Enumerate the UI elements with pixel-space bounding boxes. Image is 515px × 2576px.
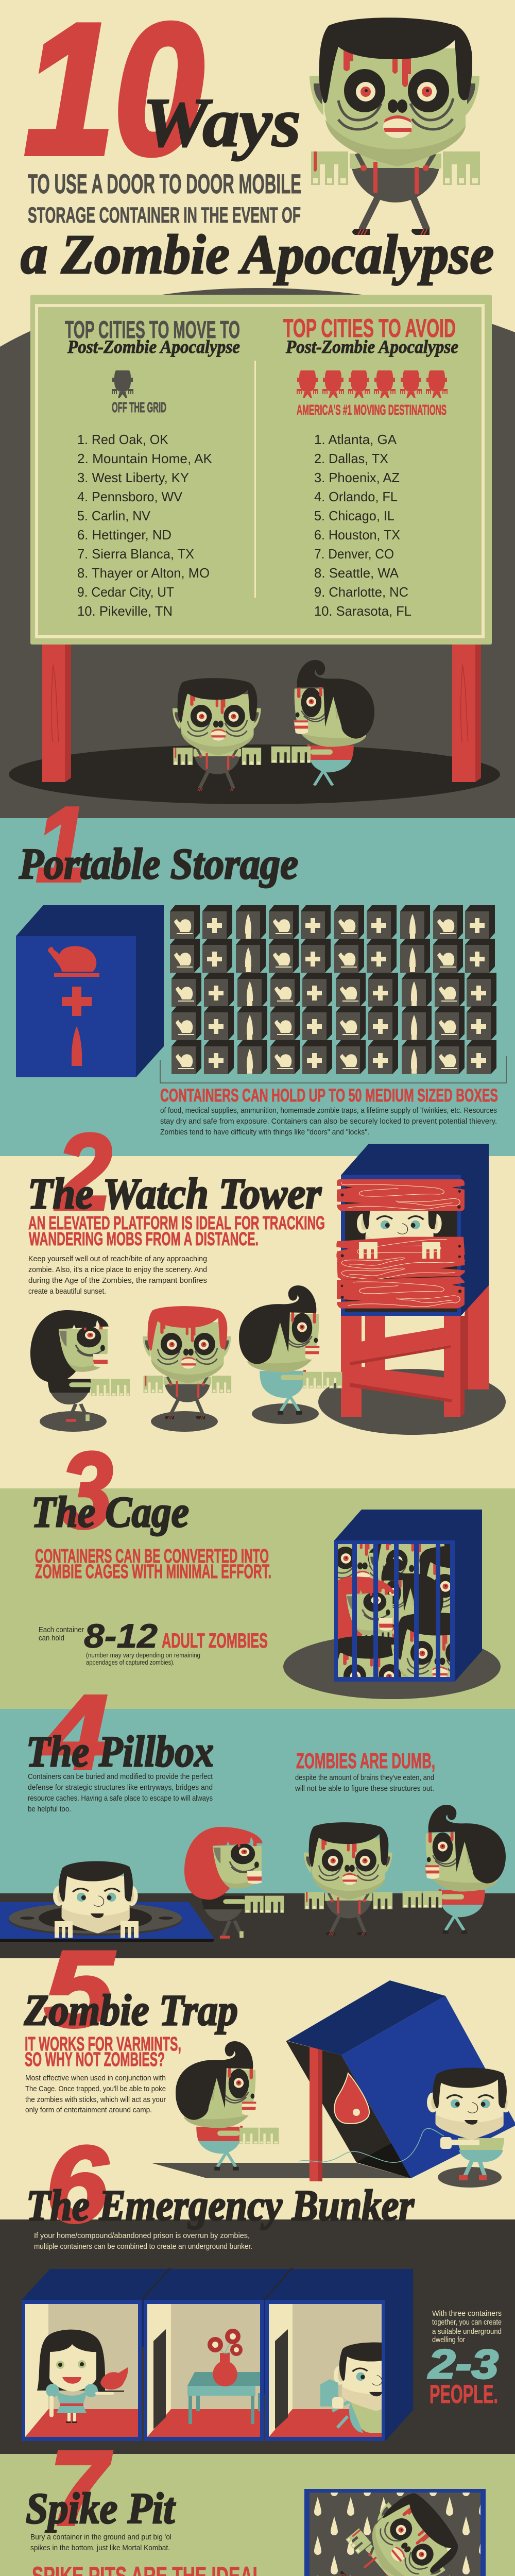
side text: three containers: dwelling for <box>432 2335 465 2344</box>
zombies approaching tower <box>30 1285 342 1432</box>
number 2: 2 <box>55 1111 112 1232</box>
callout: works for varmints <box>25 2033 181 2071</box>
list: top cities to move to: 2. Mountain Home, AK <box>77 451 213 466</box>
room 2 frame <box>144 2300 264 2441</box>
background: green section 7 <box>0 2454 515 2576</box>
callout: elevated platform: AN ELEVATED PLATFORM IS IDEAL FOR TRACKING <box>28 1212 325 1233</box>
number 7: 7 <box>49 2429 112 2547</box>
man holding string <box>427 2068 512 2188</box>
stat: 8-12 adult zombies: appendages of captured zombies). <box>86 1658 175 1666</box>
body text section 1: stay dry and safe from exposure. Containers can also be securely locked to prevent potential thievery. <box>160 1117 497 1126</box>
spike pit illustration <box>304 2483 486 2576</box>
planks on tower <box>336 1179 465 1309</box>
side text: three containers <box>432 2309 502 2344</box>
number 5: 5 <box>44 1928 115 2049</box>
background: teal section 1 <box>0 818 515 1156</box>
subtitle line 1: TO USE A DOOR TO DOOR MOBILE <box>28 169 301 199</box>
list: top cities to move to: 7. Sierra Blanca, TX <box>77 546 194 562</box>
room 3 interior <box>269 2304 382 2437</box>
body text section 2: create a beautiful sunset. <box>28 1287 106 1296</box>
list: top cities to avoid: 7. Denver, CO <box>314 546 394 562</box>
heading: spike pit: Spike Pit <box>26 2484 176 2533</box>
list: top cities to move to: 8. Thayer or Alton, MO <box>77 565 210 581</box>
list: top cities to move to: 5. Carlin, NV <box>77 508 151 523</box>
background: cream section 5 <box>0 1958 515 2219</box>
icons: six zombies <box>297 370 448 398</box>
list: top cities to avoid: 1. Atlanta, GA <box>314 432 397 447</box>
grid of 50 boxes <box>170 905 496 1074</box>
room 1 frame <box>22 2300 142 2441</box>
background: cream section 2 <box>0 1156 515 1488</box>
heading: cities to move to: TOP CITIES TO MOVE TO <box>65 316 240 343</box>
side text: three containers: a suitable underground <box>432 2327 502 2336</box>
buried container hatch <box>0 1861 214 1942</box>
body text section 7 <box>30 2533 171 2552</box>
list: top cities to avoid: 2. Dallas, TX <box>314 451 388 466</box>
list: top cities to avoid: 8. Seattle, WA <box>314 565 399 581</box>
callout: zombies are dumb: despite the amount of brains they've eaten, and <box>295 1773 434 1782</box>
man reading book <box>320 2342 382 2433</box>
body text section 5: only form of entertainment around camp. <box>25 2106 152 2114</box>
callout: elevated platform <box>28 1212 325 1249</box>
room 2 interior <box>147 2304 260 2437</box>
number 1: 1 <box>36 785 87 904</box>
heading: the cage: The Cage <box>31 1488 189 1536</box>
tower shadow <box>318 1369 506 1435</box>
list: top cities to avoid: 3. Phoenix, AZ <box>314 470 400 485</box>
panel: billboard <box>30 295 492 645</box>
title block <box>21 0 494 285</box>
list: top cities to move to <box>77 432 213 619</box>
body text section 5 <box>25 2074 166 2114</box>
body text section 5: the zombies with sticks, which will act as your <box>25 2095 166 2104</box>
body text section 2 <box>28 1255 207 1296</box>
trap shadow floor <box>151 2163 411 2178</box>
container with supplies <box>16 905 164 1077</box>
list: top cities to avoid: 9. Charlotte, NC <box>314 584 408 600</box>
body text section 6 <box>34 2231 252 2251</box>
hands holding plank <box>359 1242 440 1259</box>
body text section 6: If your home/compound/abandoned prison is overrun by zombies, <box>34 2231 250 2240</box>
panel: billboard posts <box>42 644 481 782</box>
stat: 2-3 people <box>427 2341 499 2409</box>
subtitle line 2: STORAGE CONTAINER IN THE EVENT OF <box>28 203 301 228</box>
cross braces <box>348 1327 451 1362</box>
room 3 frame <box>265 2300 385 2441</box>
number 4: 4 <box>42 1673 108 1791</box>
list: top cities to move to: 10. Pikeville, TN <box>77 603 173 619</box>
panel: section 7 spike pit <box>26 2429 486 2576</box>
body text section 1: Zombies tend to have difficulty with things like "doors" and "locks". <box>160 1128 369 1137</box>
callout: zombies are dumb <box>295 1749 435 1793</box>
list: top cities to move to: 4. Pennsboro, WV <box>77 489 183 504</box>
bunker three containers <box>22 2268 414 2441</box>
list: top cities to avoid: 10. Sarasota, FL <box>314 603 411 619</box>
man peeking out <box>53 1861 138 1934</box>
list: top cities to avoid: 5. Chicago, IL <box>314 508 394 523</box>
body text section 1 <box>160 1106 497 1137</box>
heading: portable storage: Portable Storage <box>19 840 298 888</box>
zombies at the pillbox <box>184 1805 506 1939</box>
stat: 8-12 adult zombies <box>39 1617 268 1666</box>
zombie walking into trap <box>176 2041 279 2171</box>
icon: large zombie <box>310 18 480 235</box>
number 3: 3 <box>60 1430 113 1551</box>
panel: section 5 zombie trap <box>24 1928 515 2188</box>
trigger string <box>299 2128 444 2162</box>
callout: works for varmints: SO WHY NOT ZOMBIES? <box>25 2049 165 2071</box>
heading: zombie trap: Zombie Trap <box>24 1986 238 2035</box>
bracket under boxes <box>160 1056 506 1083</box>
panel: section 6 emergency bunker <box>22 2124 502 2441</box>
watch tower structure <box>336 1144 489 1417</box>
heading: the pillbox: The Pillbox <box>26 1727 214 1776</box>
background: dark hill behind billboard <box>0 288 515 824</box>
icon: off the grid zombie <box>112 370 133 398</box>
woman with turkey <box>37 2330 128 2423</box>
subheading left: Post-Zombie Apocalypse <box>67 336 240 357</box>
body text section 7: Bury a container in the ground and put big 'ol <box>30 2533 171 2541</box>
heading: the emergency bunker: The Emergency Bunker <box>26 2181 415 2230</box>
background: cream header <box>0 0 515 361</box>
stat: 8-12 adult zombies: ADULT ZOMBIES <box>162 1630 268 1652</box>
panel: section 4 the pillbox <box>0 1673 506 1942</box>
background: dark ground section 4 <box>0 1893 515 1958</box>
stat: 8-12 adult zombies: can hold <box>39 1634 64 1642</box>
background: green section 3 <box>0 1488 515 1709</box>
stat: 8-12 adult zombies: (number may vary depending on remaining <box>86 1651 200 1659</box>
body text section 4: resource caches. Having a safe place to escape to will always <box>28 1794 213 1803</box>
body text section 4 <box>28 1772 213 1814</box>
body text section 6: multiple containers can be combined to create an underground bunker. <box>34 2242 252 2251</box>
man peeking out of tower <box>357 1189 442 1261</box>
tilted trap container <box>286 1980 515 2181</box>
callout: containers converted into cages <box>35 1546 271 1583</box>
background: dark section 6 <box>0 2219 515 2454</box>
panel: section 1 portable storage <box>16 785 506 1137</box>
panel: section 2 watch tower <box>28 1111 506 1435</box>
body text section 4: Containers can be buried and modified to provide the perfect <box>28 1772 213 1781</box>
stat: 8-12 adult zombies: Each container <box>39 1625 84 1634</box>
zombie cage <box>334 1510 482 1682</box>
background: teal section 4 <box>0 1709 515 1893</box>
title word Ways: Ways <box>143 84 301 161</box>
body text section 2: Keep yourself well out of reach/bite of any approaching <box>28 1255 207 1263</box>
side text: three containers: together, you can create <box>432 2318 502 2327</box>
list: top cities to avoid: 6. Houston, TX <box>314 527 400 543</box>
label: off the grid: OFF THE GRID <box>112 399 166 415</box>
callout: zombies are dumb: will not be able to figure these structures out. <box>295 1784 434 1793</box>
list: top cities to move to: 6. Hettinger, ND <box>77 527 171 543</box>
title a Zombie Apocalypse: a Zombie Apocalypse <box>21 224 494 285</box>
body text section 2: during the Age of the Zombies, the rampant bonfires <box>28 1276 207 1285</box>
callout: containers converted into cages: ZOMBIE CAGES WITH MINIMAL EFFORT. <box>35 1561 271 1583</box>
list: top cities to move to: 3. West Liberty, KY <box>77 470 189 485</box>
posts base over shadow <box>42 742 481 782</box>
table with vase and flowers <box>187 2329 260 2424</box>
list: top cities to move to: 9. Cedar City, UT <box>77 584 174 600</box>
heading: the watch tower: The Watch Tower <box>28 1170 322 1218</box>
subheading right: Post-Zombie Apocalypse <box>285 336 458 357</box>
callout: containers converted into cages: CONTAINERS CAN BE CONVERTED INTO <box>35 1546 269 1567</box>
list: top cities to move to: 1. Red Oak, OK <box>77 432 169 447</box>
stat: 2-3 people: 2-3 <box>427 2341 499 2387</box>
body text section 7: spikes in the bottom, just like Mortal Kombat. <box>30 2544 170 2552</box>
body text section 5: The Cage. Once trapped, you'll be able to poke <box>25 2084 166 2093</box>
callout: works for varmints: IT WORKS FOR VARMINTS, <box>25 2033 181 2055</box>
body text section 4: defense for strategic structures like entryways, bridges and <box>28 1783 213 1792</box>
number 6: 6 <box>46 2124 108 2245</box>
panel: section 3 the cage <box>33 1450 501 1699</box>
callout: elevated platform: WANDERING MOBS FROM A DISTANCE. <box>29 1228 259 1249</box>
body text section 5: Most effective when used in conjunction with <box>25 2074 166 2082</box>
body text section 2: zombie. Also, it's a nice place to enjoy the scenery. And <box>28 1265 207 1274</box>
ground shadow under billboard <box>9 744 500 804</box>
stat: 8-12 adult zombies: 8-12 <box>84 1617 158 1655</box>
body text section 4: be helpful too. <box>28 1805 71 1814</box>
list: top cities to avoid <box>314 432 411 619</box>
zombies under billboard <box>173 660 374 791</box>
side text: three containers: With three containers <box>432 2309 502 2318</box>
cage shadow <box>283 1634 501 1699</box>
room 1 interior <box>25 2304 138 2437</box>
list: top cities to avoid: 4. Orlando, FL <box>314 489 398 504</box>
